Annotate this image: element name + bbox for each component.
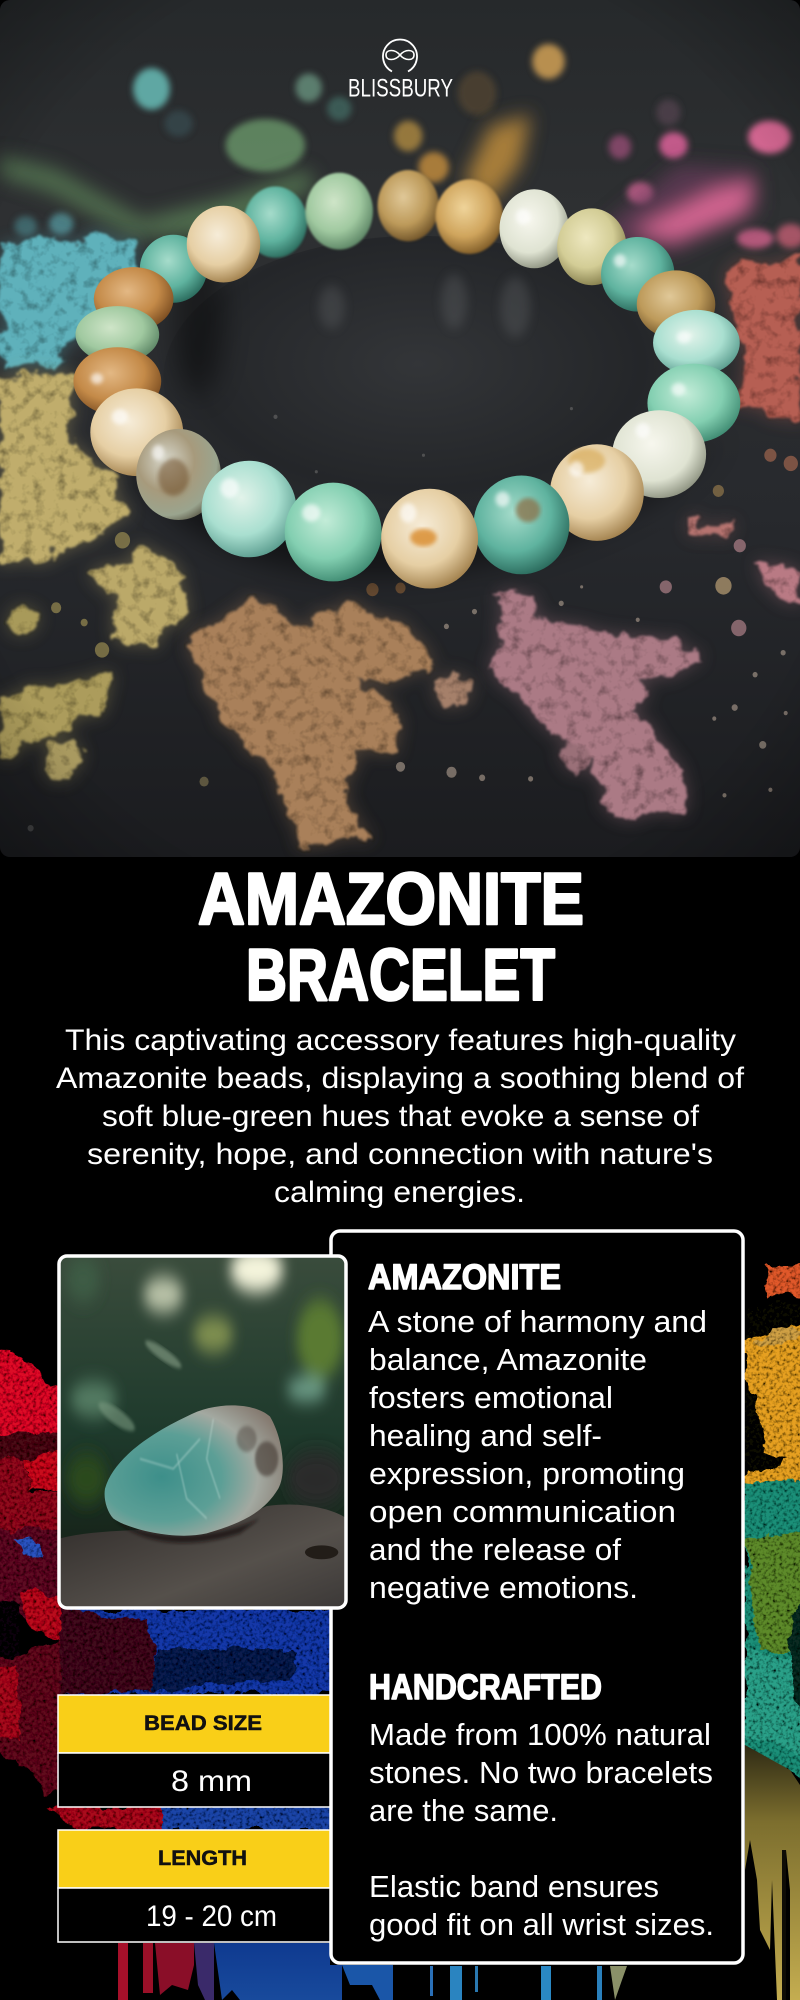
bead size table bbox=[58, 1695, 330, 1807]
panel text: Handcrafted: stones. No two bracelets bbox=[369, 1755, 713, 1790]
stone photo bbox=[59, 1247, 347, 1613]
bead size table: 8 mm bbox=[171, 1765, 252, 1798]
panel text: Amazonite: negative emotions. bbox=[369, 1570, 638, 1605]
panel text: Handcrafted: are the same. bbox=[369, 1793, 558, 1828]
right paint splash bbox=[745, 1266, 800, 2000]
intro paragraph bbox=[56, 1024, 745, 1209]
intro paragraph: soft blue-green hues that evoke a sense of bbox=[102, 1100, 700, 1133]
intro paragraph: calming energies. bbox=[274, 1176, 525, 1209]
bracelet shadow bbox=[171, 496, 660, 590]
panel text: Amazonite: healing and self- bbox=[369, 1418, 602, 1453]
powder specks bbox=[28, 407, 798, 832]
blurred background powder bbox=[14, 44, 800, 248]
teal and coral powder bbox=[0, 236, 800, 422]
panel text: Amazonite: fosters emotional bbox=[369, 1380, 613, 1415]
brand logo: BLISSBURY bbox=[348, 74, 453, 102]
panel text: Handcrafted: good fit on all wrist sizes. bbox=[369, 1907, 714, 1942]
bottom drips bbox=[118, 1943, 627, 2000]
title bbox=[198, 859, 584, 1016]
info panel bbox=[331, 1231, 743, 1963]
title: AMAZONITE bbox=[198, 859, 584, 940]
panel text: Handcrafted: Made from 100% natural bbox=[369, 1717, 711, 1752]
bracelet beads bbox=[73, 170, 740, 589]
reflection in the centre bbox=[318, 274, 531, 337]
intro paragraph: serenity, hope, and connection with nature's bbox=[87, 1138, 713, 1171]
brown powder bbox=[189, 598, 470, 845]
length table bbox=[58, 1830, 330, 1942]
panel text: Amazonite: expression, promoting bbox=[369, 1456, 685, 1491]
amazonite stone bbox=[105, 1405, 283, 1536]
hero photo: bracelet on powder bbox=[0, 0, 800, 857]
ochre powder bbox=[0, 373, 189, 778]
brand logo bbox=[348, 39, 453, 102]
length table: 19 - 20 cm bbox=[146, 1900, 277, 1933]
intro paragraph: Amazonite beads, displaying a soothing blend of bbox=[56, 1062, 745, 1095]
panel text: Handcrafted: Elastic band ensures bbox=[369, 1869, 659, 1904]
panel heading: Amazonite: AMAZONITE bbox=[368, 1258, 561, 1297]
pink powder bbox=[490, 518, 800, 817]
rock ledge bbox=[60, 1504, 347, 1613]
panel heading: Handcrafted: HANDCRAFTED bbox=[369, 1668, 602, 1707]
length table: LENGTH bbox=[158, 1847, 247, 1870]
panel text: Amazonite bbox=[368, 1304, 707, 1605]
panel text: Amazonite: and the release of bbox=[369, 1532, 621, 1567]
left paint splash bbox=[0, 1349, 340, 1830]
bead size table: BEAD SIZE bbox=[144, 1712, 262, 1735]
panel text: Handcrafted bbox=[369, 1717, 714, 1942]
panel text: Amazonite: open communication bbox=[369, 1494, 676, 1529]
intro paragraph: This captivating accessory features high-quality bbox=[65, 1024, 736, 1057]
title: BRACELET bbox=[246, 935, 555, 1016]
panel text: Amazonite: A stone of harmony and bbox=[368, 1304, 707, 1339]
panel text: Amazonite: balance, Amazonite bbox=[369, 1342, 647, 1377]
